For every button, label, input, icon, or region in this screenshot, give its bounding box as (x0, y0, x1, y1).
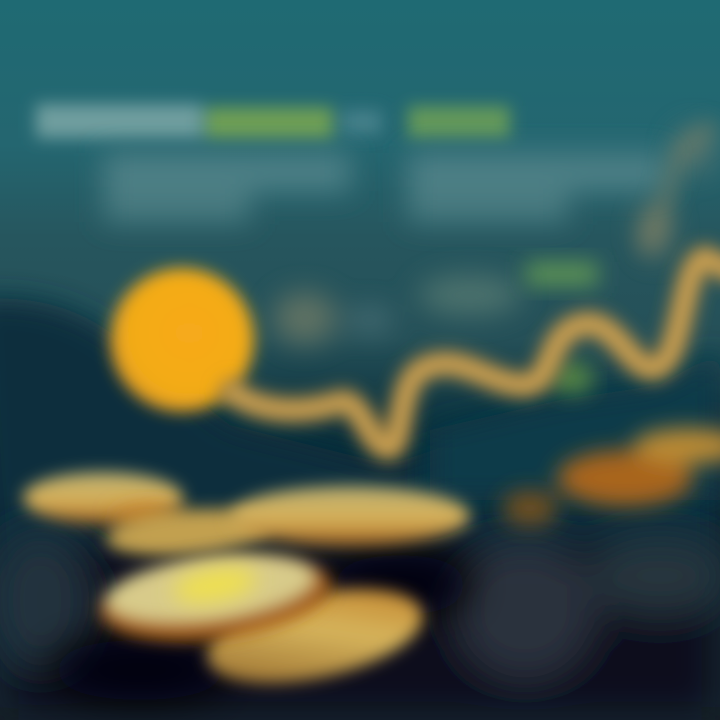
rising gold line chart (232, 258, 720, 448)
distant map-like haze (273, 126, 717, 344)
coin: top left orange edge (114, 506, 186, 534)
coin: bright centre (95, 541, 335, 653)
icon: golden sun coin (110, 268, 254, 412)
heading: pale word (36, 104, 202, 138)
heading: faint connector word (342, 110, 382, 134)
coin: upper right wide (230, 486, 470, 546)
dark left hillside (0, 298, 720, 720)
shadow beneath coin stack (50, 555, 470, 700)
heading: second green word (408, 106, 510, 138)
green chart label (526, 262, 598, 286)
heading (36, 104, 510, 139)
body text left column (104, 153, 350, 222)
coin: upper middle small (104, 503, 276, 561)
coin highlight (171, 562, 259, 608)
faint dotted trend line (645, 125, 715, 250)
rocky foreground (0, 530, 720, 720)
right coin pile (502, 428, 720, 526)
coin: lower right (199, 572, 431, 700)
coin: top left (23, 472, 183, 524)
green shadow under line (550, 362, 594, 394)
dark right hillside (430, 350, 720, 500)
body text right column (408, 153, 666, 222)
heading: green word (205, 107, 333, 139)
